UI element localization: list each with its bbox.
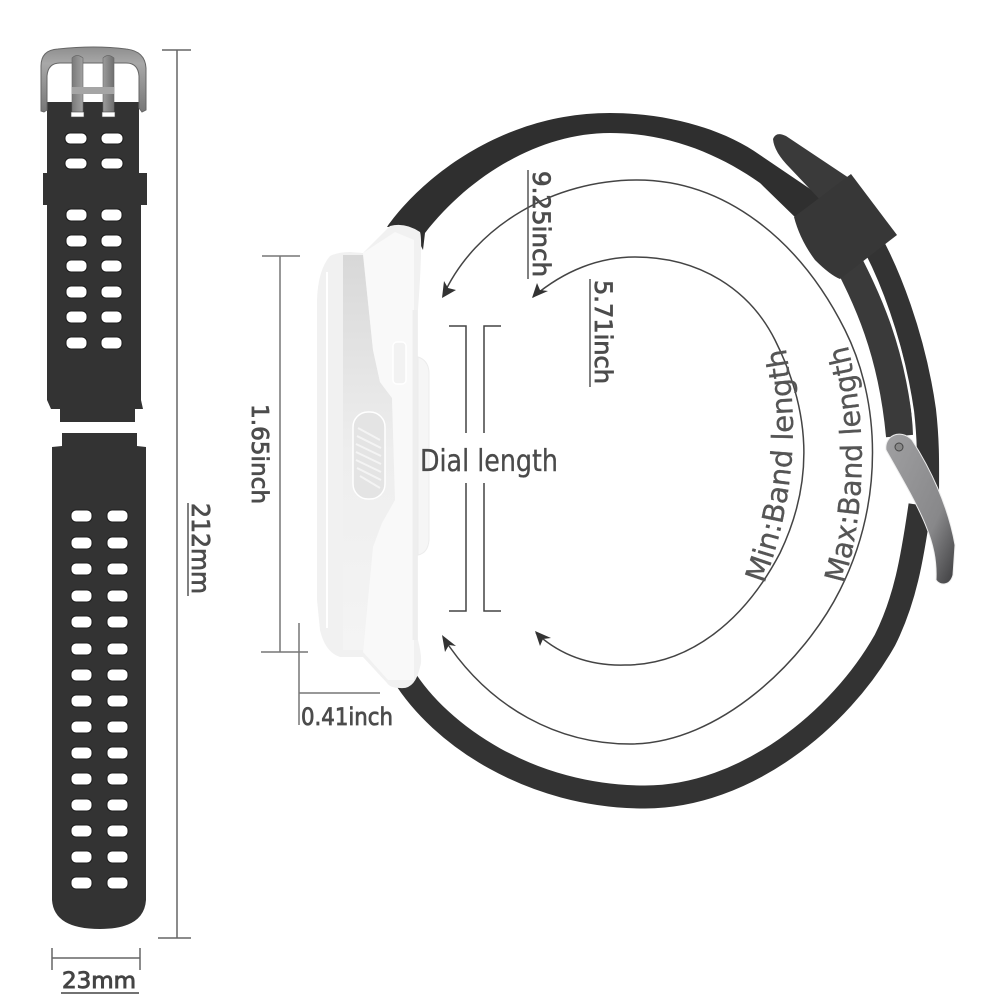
dimension: strap length line (158, 50, 191, 938)
strap: lower perforated band piece (52, 433, 146, 929)
band bottom section (403, 505, 920, 797)
dimension: strap width bracket (52, 948, 140, 970)
arrow: max band length arc (442, 180, 872, 744)
band top section (387, 113, 822, 250)
label: 5.71inch: 5.71inch (589, 280, 617, 384)
dimension: dial height with watch body (261, 256, 308, 652)
watch band: side view loop (387, 113, 928, 797)
label: Dial length: Dial length (420, 444, 558, 479)
label: Max:Band length: Max:Band length (824, 347, 862, 582)
watch side button (418, 357, 429, 555)
dimension: dial length brackets (449, 326, 501, 611)
watch small button (393, 342, 406, 384)
label: 212mm: 212mm (186, 503, 215, 594)
arrow: min band length arc (532, 257, 804, 665)
dimension: thickness bracket (299, 623, 380, 725)
band keeper (794, 174, 897, 279)
icon: strap buckle (41, 47, 146, 117)
lower strap holes (71, 510, 128, 889)
label: 0.41inch: 0.41inch (301, 703, 393, 731)
watch body shading (343, 255, 395, 650)
watch body: side view (317, 225, 429, 688)
icon: buckle clasp (886, 434, 955, 584)
label: 9.25inch: 9.25inch (527, 171, 555, 277)
strap: upper flat band piece (43, 102, 147, 422)
watch sensor oval with ridges (353, 412, 385, 499)
band tail (773, 134, 855, 205)
label: 23mm: 23mm (62, 969, 136, 994)
band inner section below keeper (842, 250, 900, 436)
label: Min:Band length: Min:Band length (744, 350, 798, 582)
label: 1.65inch: 1.65inch (246, 404, 272, 504)
upper strap holes (65, 133, 123, 349)
